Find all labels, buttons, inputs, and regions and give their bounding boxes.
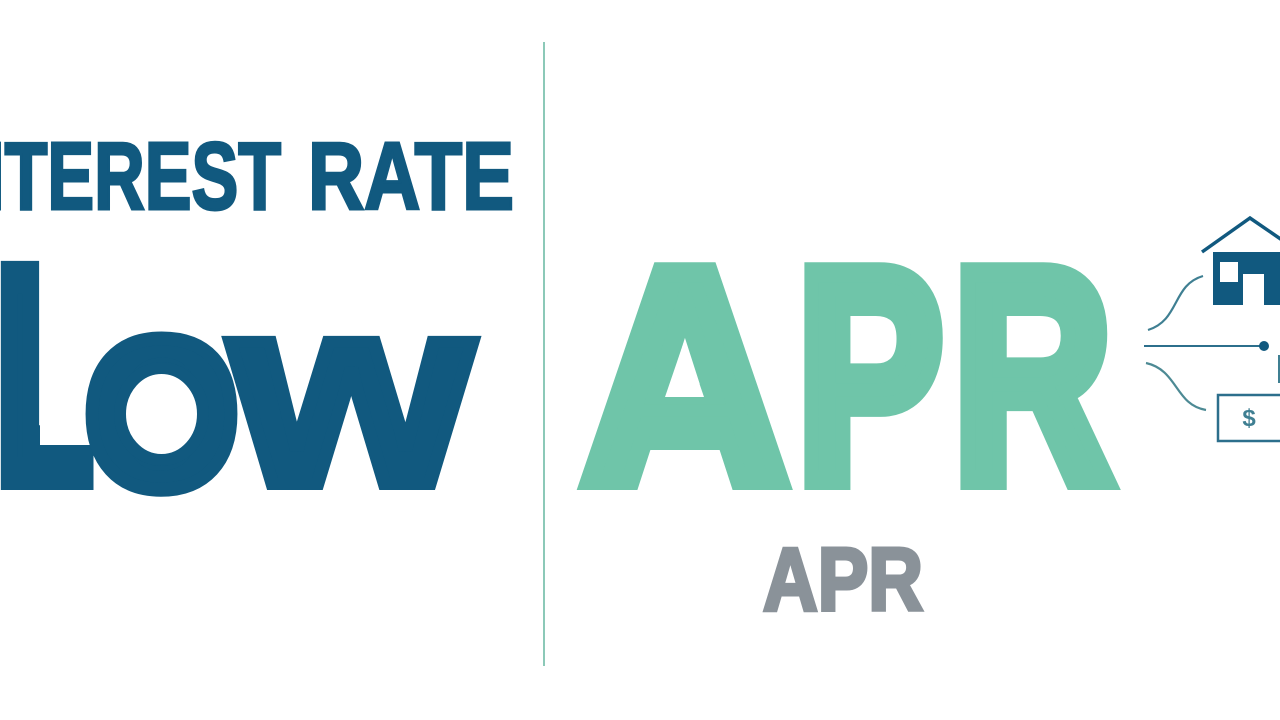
big word: APR: P xyxy=(797,207,943,544)
connector: curve to bill xyxy=(1146,363,1206,410)
icon: partial bar xyxy=(1278,355,1280,383)
big word: APR: R xyxy=(953,207,1112,544)
big word: APR xyxy=(583,207,1112,544)
big word: Low: o xyxy=(82,238,241,546)
icon: dollar bill: $ xyxy=(1242,405,1256,432)
heading: interest rate: RATE xyxy=(308,123,514,230)
connector: curve to house xyxy=(1148,276,1203,330)
center divider xyxy=(543,42,545,666)
connector: center line with dot xyxy=(1144,341,1269,351)
icon: dollar bill xyxy=(1218,395,1280,441)
big word: Low: L xyxy=(0,216,90,534)
sub label: APR: APR xyxy=(763,529,923,629)
big word: Low: w xyxy=(226,241,473,542)
big word: APR: A xyxy=(583,207,787,544)
icon: house xyxy=(1202,218,1280,305)
big word: Low xyxy=(0,216,473,546)
